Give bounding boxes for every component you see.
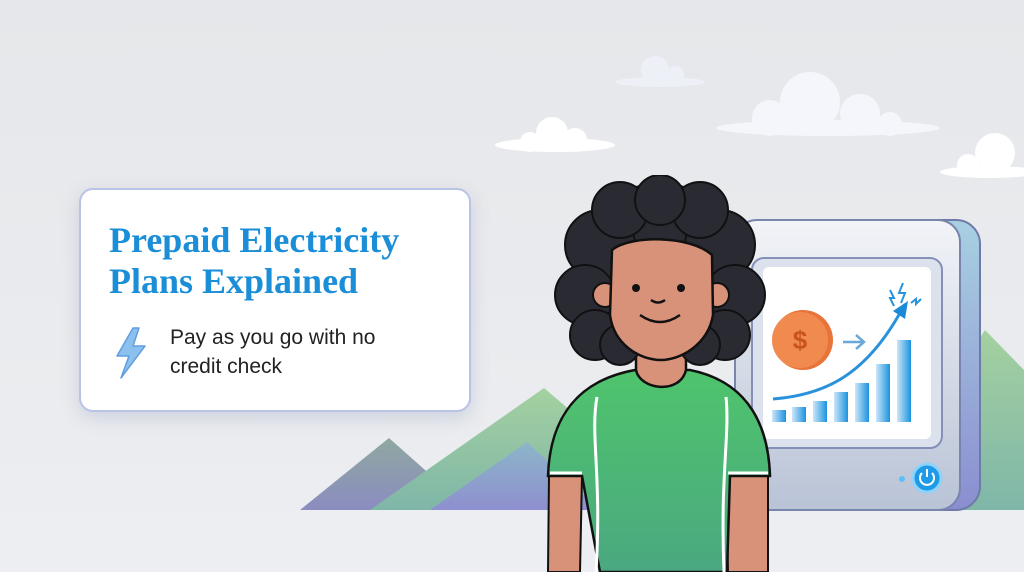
neck <box>636 335 686 387</box>
shirt <box>548 370 770 572</box>
meter device <box>734 219 981 511</box>
title: Prepaid Electricity <box>109 220 399 260</box>
cloud <box>495 117 615 152</box>
face <box>593 239 729 360</box>
mountains <box>300 330 1024 510</box>
hair <box>555 175 765 365</box>
person <box>546 175 772 572</box>
title: Plans Explained <box>109 261 358 301</box>
cloud <box>615 56 705 87</box>
icon: coin: $ <box>793 325 808 355</box>
icon: lightning bolt <box>116 327 146 379</box>
cloud <box>716 72 940 136</box>
subtitle: credit check <box>170 355 282 378</box>
title card <box>79 188 471 412</box>
bar chart <box>772 340 911 422</box>
icon: coin <box>772 310 833 370</box>
screen <box>752 258 942 448</box>
subtitle: Pay as you go with no <box>170 326 375 349</box>
cloud <box>940 133 1024 178</box>
title <box>109 220 399 301</box>
subtitle <box>170 326 375 378</box>
icon: power button <box>899 464 941 492</box>
arrow <box>843 335 864 349</box>
arms <box>548 475 582 572</box>
